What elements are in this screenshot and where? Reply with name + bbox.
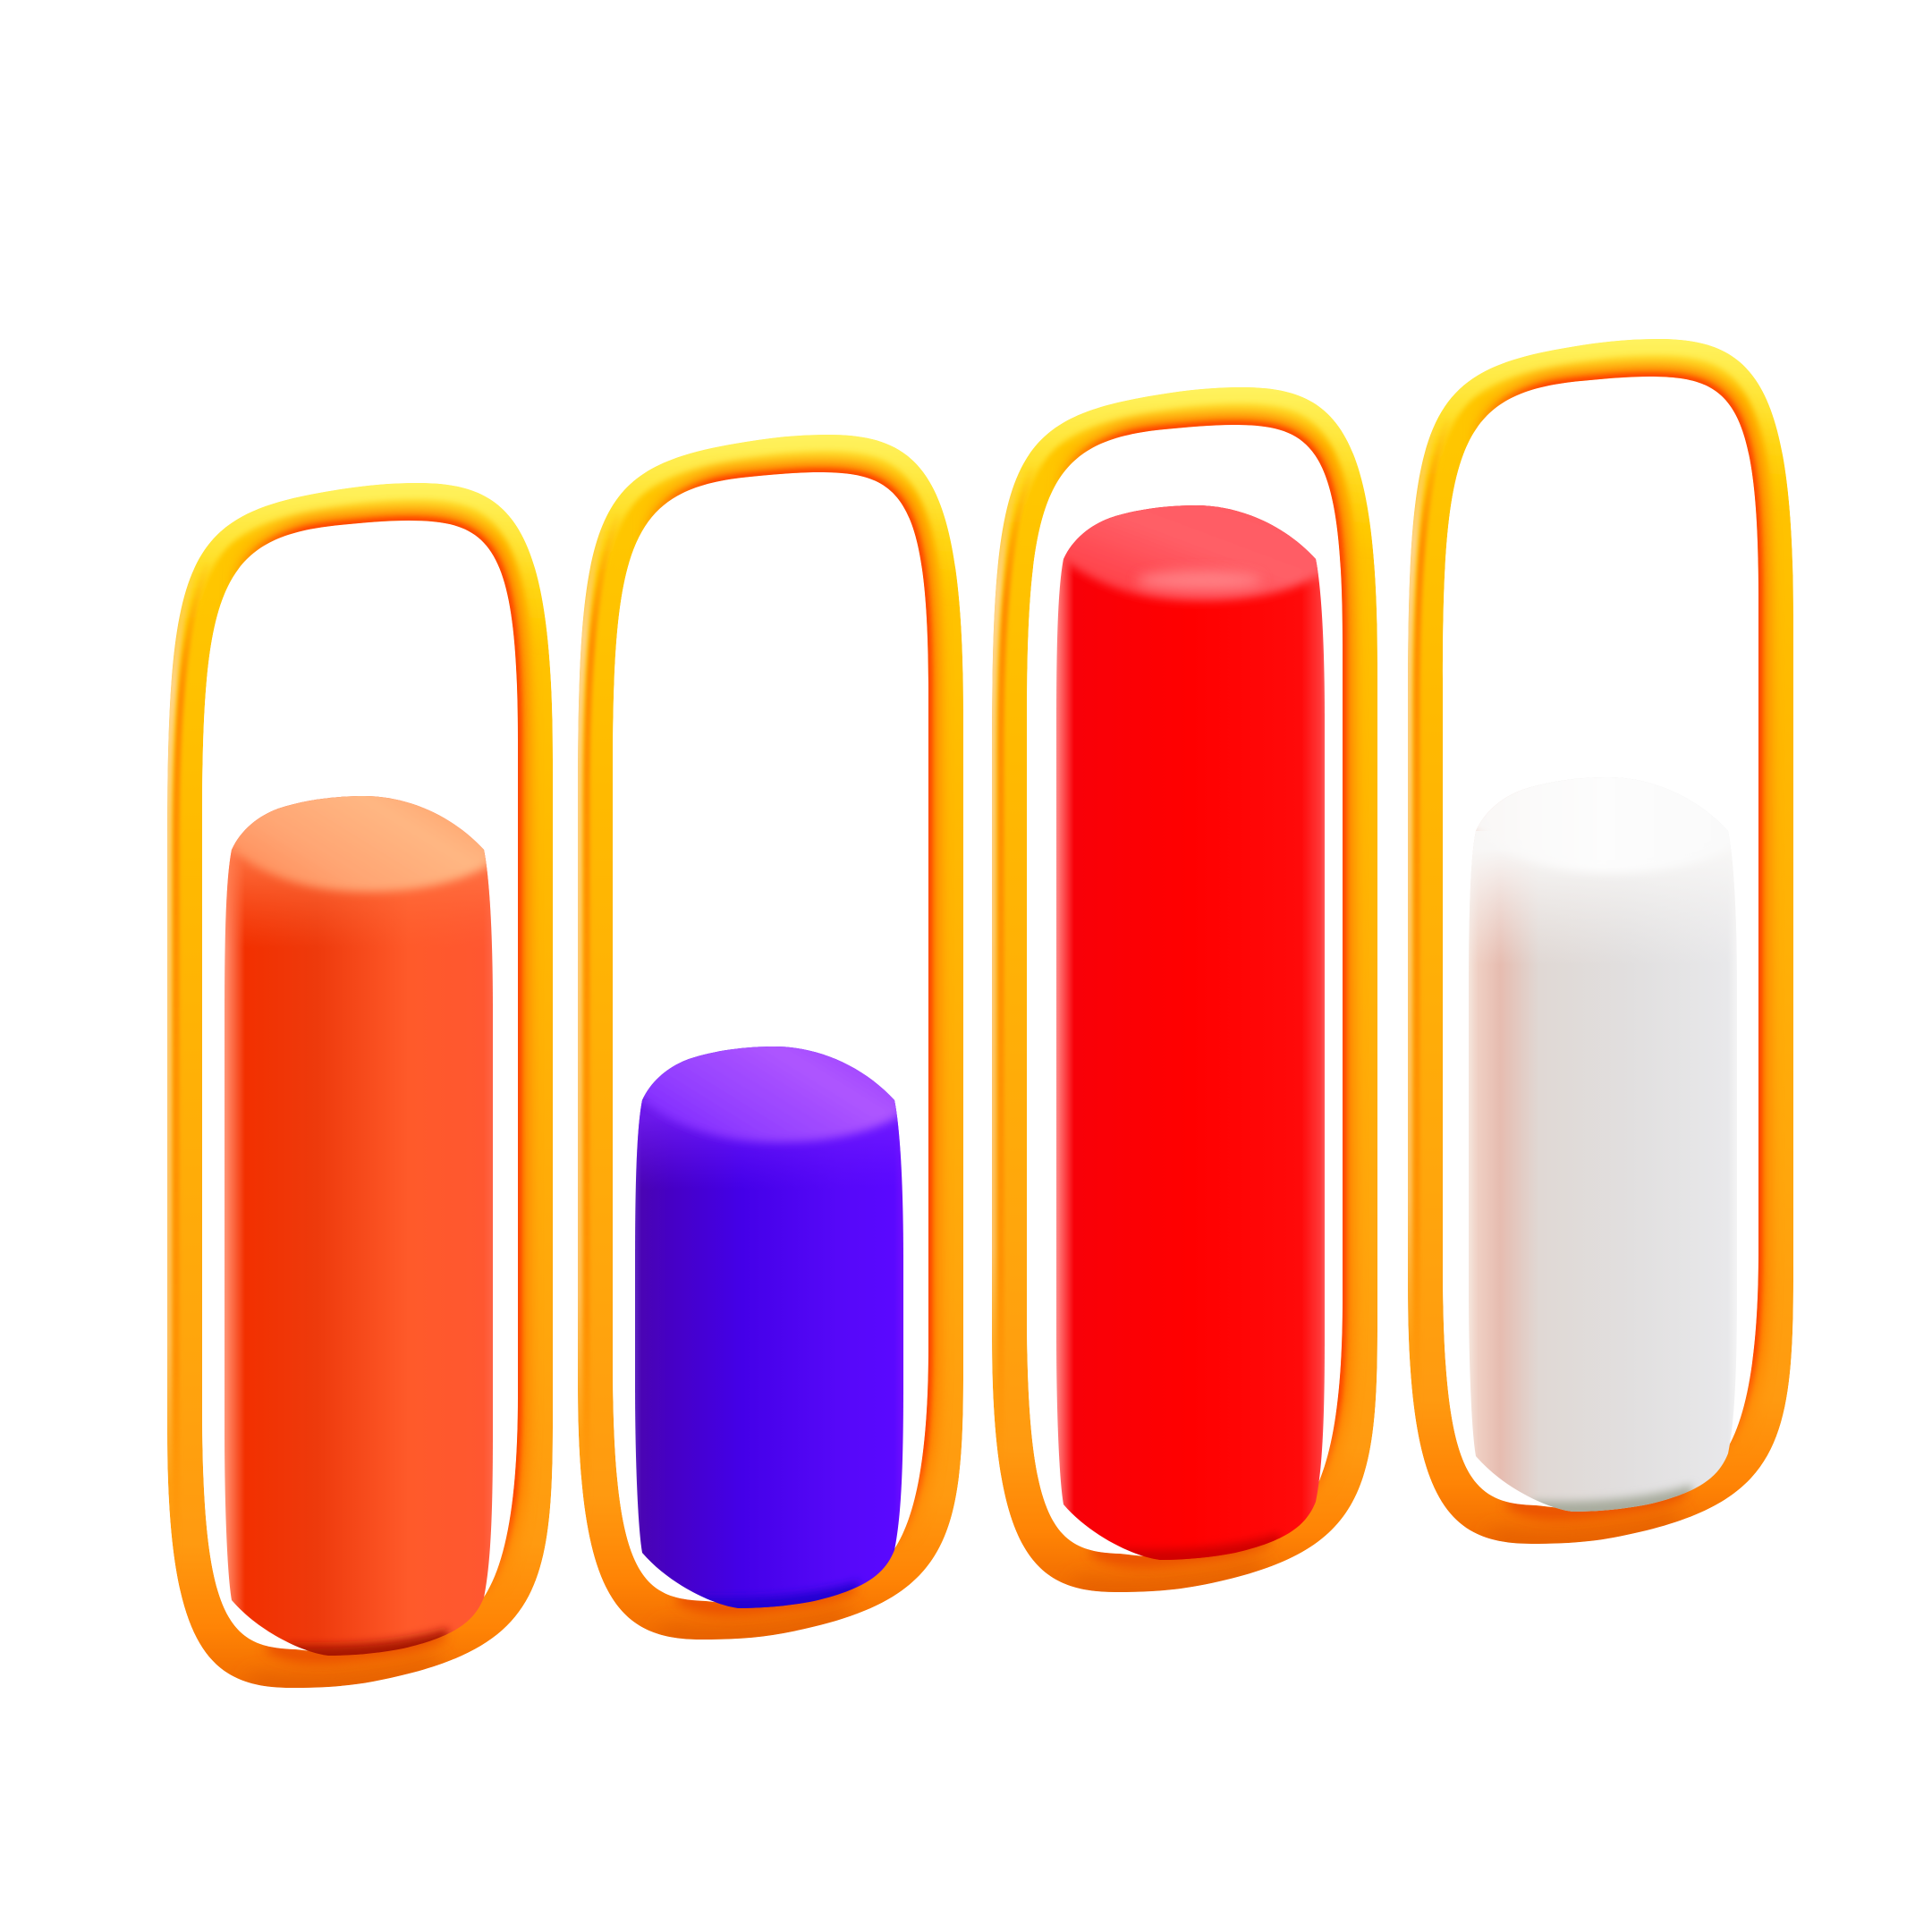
red bar [1056, 505, 1325, 1560]
column 3: red bar in frame [992, 387, 1377, 1592]
frame 4 [1408, 339, 1793, 1544]
frame 3 [992, 387, 1377, 1592]
frame 2 [578, 435, 963, 1640]
column 2: purple bar in frame [578, 435, 963, 1640]
purple bar [635, 1046, 903, 1608]
white bar [1469, 777, 1737, 1512]
bar chart illustration [167, 339, 1793, 1688]
column 4: white bar in frame [1408, 339, 1793, 1544]
column 1: orange bar in frame [167, 483, 553, 1688]
orange bar [225, 796, 493, 1656]
frame 1 [167, 483, 553, 1688]
